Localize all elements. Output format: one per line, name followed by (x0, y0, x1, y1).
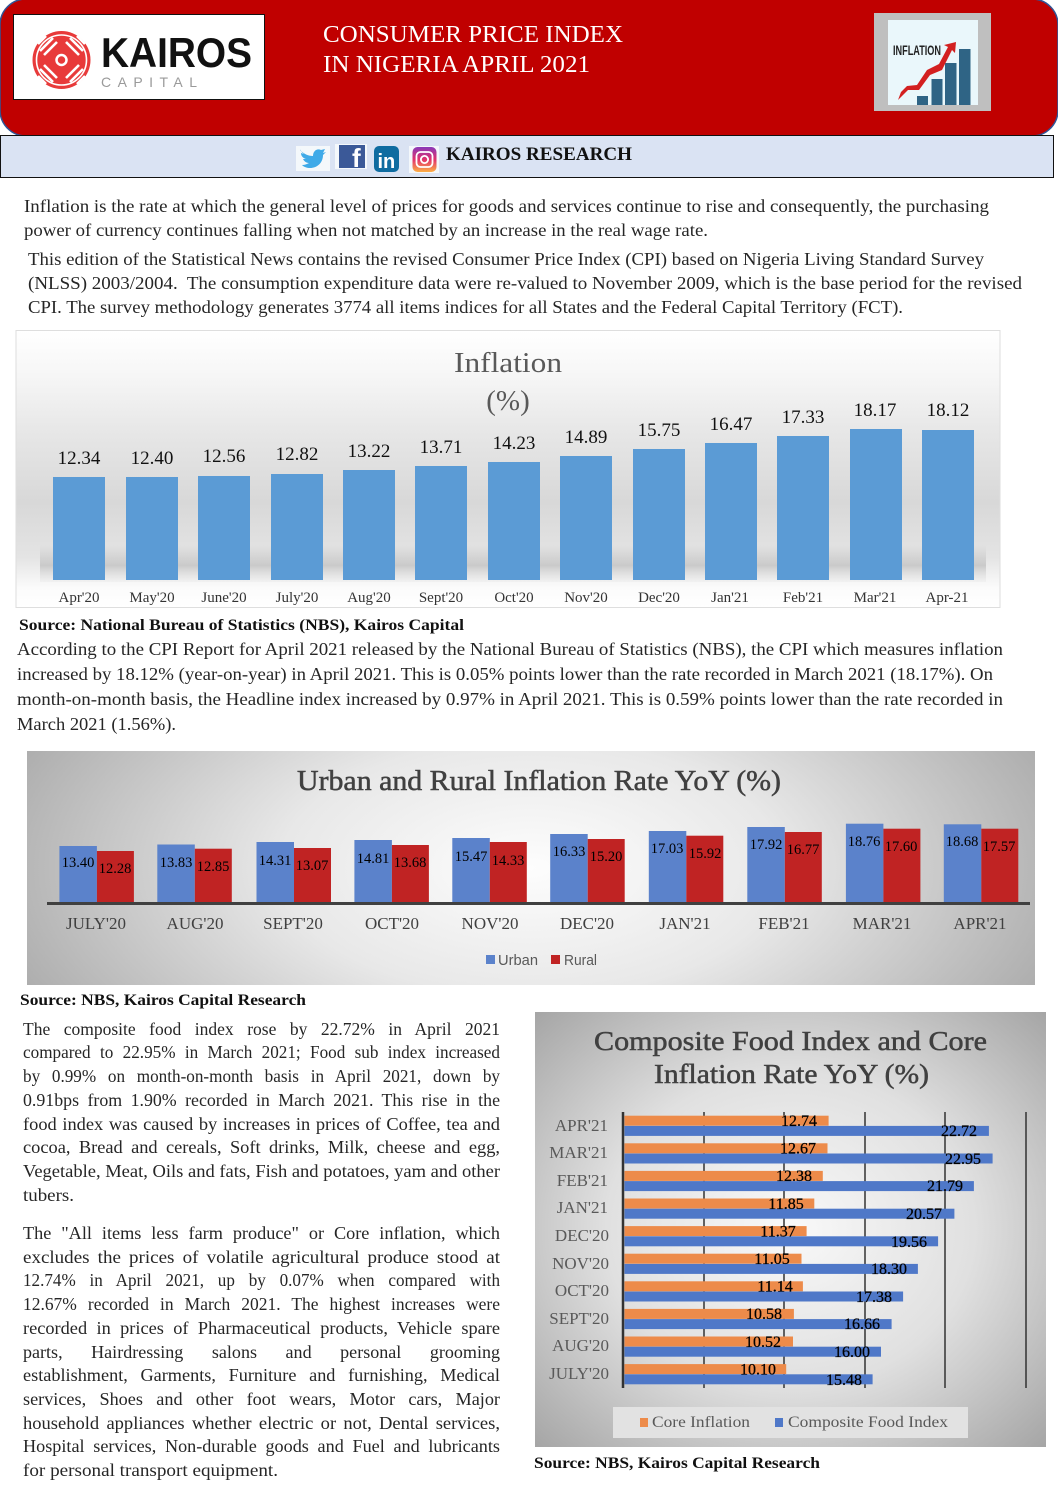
rural values: 16.77 (787, 842, 819, 858)
food index commentary: compared to 22.95% in March 2021; Food sub index increased (23, 1042, 500, 1062)
bar values: 17.33 (782, 407, 824, 428)
bar values: 16.47 (710, 414, 752, 435)
source: urban and rural chart: Source: NBS, Kairos Capital Research (20, 992, 306, 1009)
chart: composite food index and core inflation (535, 1012, 1046, 1447)
icon: instagram (409, 146, 439, 173)
month axis: Sept'20 (419, 590, 463, 606)
chart: inflation (16, 330, 1000, 608)
month axis: AUG'20 (167, 914, 223, 933)
food index commentary: food index was caused by increases in prices of Coffee, tea and (23, 1114, 500, 1134)
month axis: DEC'20 (555, 1226, 609, 1245)
core inflation values: 11.85 (768, 1196, 804, 1213)
core inflation commentary: 12.67% recorded in March 2021. The highest increases were (23, 1294, 500, 1314)
core inflation values: 10.10 (740, 1362, 776, 1378)
logo: Kairos Capital (14, 14, 264, 100)
month axis: MAR'21 (549, 1143, 608, 1162)
urban bars (59, 824, 981, 903)
chart title (454, 347, 563, 417)
icon: linkedin (374, 146, 399, 173)
month axis: Aug'20 (347, 590, 391, 606)
intro text (24, 196, 1022, 318)
month axis: June'20 (201, 590, 247, 606)
food index commentary: cocoa, Bread and cereals, Soft drinks, Milk, cheese and egg, (23, 1137, 500, 1157)
core inflation commentary: parts, Hairdressing salons and personal grooming (23, 1342, 500, 1362)
month axis: JULY'20 (549, 1364, 609, 1383)
composite food index bars (624, 1126, 993, 1384)
month axis: Mar'21 (854, 590, 896, 606)
month axis: FEB'21 (557, 1171, 608, 1190)
month axis: JAN'21 (659, 914, 711, 933)
composite food index values: 15.48 (826, 1372, 862, 1389)
composite food index values: 17.38 (856, 1289, 892, 1306)
chart: urban and rural inflation (27, 751, 1035, 985)
composite food index values: 21.79 (927, 1178, 963, 1195)
legend (486, 953, 597, 969)
icon: inflation chart image: INFLATION (893, 43, 941, 58)
month axis (66, 914, 1007, 933)
core inflation commentary: services, Shoes and other foot wears, Motor cars, Major (23, 1389, 500, 1409)
urban values: 16.33 (553, 844, 585, 860)
bar values: 14.89 (565, 427, 607, 448)
month axis (58, 590, 969, 606)
bar values: 13.22 (348, 441, 390, 462)
core inflation commentary: 12.74% in April 2021, up by 0.07% when compared with (23, 1270, 500, 1290)
core inflation commentary: excludes the prices of volatile agricultural produce stood at (23, 1247, 500, 1267)
month axis: FEB'21 (758, 914, 810, 933)
bar values: 18.12 (927, 400, 969, 421)
food index commentary: 0.91bps from 1.90% recorded in March 2021. This rise in the (23, 1090, 500, 1110)
composite food index values: 18.30 (871, 1261, 907, 1278)
urban values: 14.81 (357, 851, 389, 867)
intro text: power of currency continues falling when not matched by an increase in the real wage rate. (24, 220, 708, 240)
core inflation values: 12.38 (776, 1168, 812, 1185)
month axis: MAR'21 (853, 914, 911, 933)
month axis: NOV'20 (462, 914, 518, 933)
urban values: 13.83 (160, 855, 192, 871)
social label: KAIROS RESEARCH (446, 145, 633, 165)
month axis: JAN'21 (557, 1198, 608, 1217)
core inflation commentary (23, 1223, 500, 1480)
month axis: APR'21 (555, 1116, 608, 1135)
urban values: 14.31 (259, 853, 291, 869)
bar values: 12.56 (203, 446, 245, 467)
core inflation commentary: establishment, Garments, Furniture and furnishing, Medical (23, 1365, 500, 1385)
icon: facebook (335, 143, 367, 173)
bar values: 12.82 (276, 444, 318, 465)
food index commentary: Vegetable, Meat, Oils and fats, Fish and potatoes, yam and other (23, 1161, 500, 1181)
grid lines (623, 1112, 1026, 1388)
core inflation values: 10.52 (745, 1334, 781, 1351)
rural values: 15.92 (689, 846, 721, 862)
chart title (594, 1026, 987, 1089)
composite food index values: 19.56 (891, 1234, 927, 1251)
food index commentary: by 0.99% on month-on-month basis in April 2021, down by (23, 1066, 500, 1086)
bar values: 18.17 (854, 400, 896, 421)
logo: Kairos Capital: KAIROS (101, 29, 252, 76)
rural values: 17.60 (885, 839, 917, 855)
title: IN NIGERIA APRIL 2021 (323, 52, 590, 78)
month axis: JULY'20 (66, 914, 126, 933)
month axis: Apr-21 (925, 590, 969, 606)
logo: Kairos Capital: CAPITAL (101, 74, 197, 90)
chart title: (%) (486, 385, 530, 417)
core inflation commentary: Hospital services, Non-durable goods and Fuel and lubricants (23, 1436, 500, 1456)
month axis: SEPT'20 (549, 1309, 609, 1328)
intro text: (NLSS) 2003/2004. The consumption expenditure data were re-valued to November 2009, which is the base period for the revised (28, 273, 1022, 294)
core inflation bars (624, 1116, 829, 1374)
composite food index values: 22.95 (945, 1151, 981, 1168)
core inflation values: 12.74 (781, 1113, 817, 1130)
urban values: 18.68 (946, 834, 978, 850)
core inflation commentary: household appliances whether electric or not, Dental services, (23, 1413, 500, 1433)
intro text: CPI. The survey methodology generates 3774 all items indices for all States and the Federal Capital Territory (FCT). (28, 297, 903, 318)
month axis: May'20 (129, 590, 175, 606)
rural values: 17.57 (983, 839, 1015, 855)
icon: twitter (296, 146, 330, 171)
rural values (99, 839, 1015, 877)
month axis (549, 1116, 609, 1383)
rural bars (97, 829, 1018, 903)
rural values: 13.68 (394, 855, 426, 871)
intro text: This edition of the Statistical News contains the revised Consumer Price Index (CPI) based on Nigeria Living Standard Survey (28, 249, 984, 270)
urban values: 18.76 (848, 834, 880, 850)
title: CONSUMER PRICE INDEX (323, 22, 623, 48)
chart title: Inflation Rate YoY (%) (654, 1059, 929, 1089)
urban values: 17.92 (750, 837, 782, 853)
legend (613, 1407, 968, 1438)
rural values: 15.20 (590, 849, 622, 865)
legend: Rural (564, 953, 597, 969)
month axis: Dec'20 (638, 590, 680, 606)
month axis: APR'21 (953, 914, 1007, 933)
rural values: 12.28 (99, 861, 131, 877)
bar values (58, 400, 969, 469)
social bar (0, 136, 1054, 178)
core inflation values: 11.37 (760, 1224, 796, 1240)
month axis: Feb'21 (783, 590, 823, 606)
composite food index values (826, 1123, 981, 1389)
CPI commentary: According to the CPI Report for April 2021 released by the National Bureau of Statistics (NBS), the CPI which measures inflation (17, 639, 1003, 660)
chart title: Composite Food Index and Core (594, 1026, 987, 1056)
CPI commentary: month-on-month basis, the Headline index increased by 0.97% in April 2021. This is 0.59% points lower than the rate recorded in (17, 689, 1003, 709)
legend: Urban (498, 953, 538, 969)
month axis: Nov'20 (564, 590, 608, 606)
chart title: Urban and Rural Inflation Rate YoY (%) (297, 766, 781, 797)
bar values: 13.71 (420, 437, 462, 458)
month axis: AUG'20 (552, 1336, 609, 1355)
source: inflation chart: Source: National Bureau of Statistics (NBS), Kairos Capital (19, 617, 465, 634)
core inflation values: 12.67 (780, 1140, 816, 1158)
month axis: OCT'20 (365, 914, 419, 933)
bar values: 12.34 (58, 448, 101, 469)
month axis: NOV'20 (552, 1254, 609, 1273)
intro text: Inflation is the rate at which the general level of prices for goods and services continue to rise and consequently, the purchasing (24, 196, 989, 216)
urban values: 13.40 (62, 855, 94, 871)
CPI commentary: increased by 18.12% (year-on-year) in April 2021. This is 0.05% points lower than the rate recorded in March 2021 (18.17%). On (17, 664, 993, 685)
header banner (0, 0, 1058, 136)
bar values: 15.75 (638, 420, 680, 441)
rural values: 12.85 (197, 859, 229, 875)
source: composite chart: Source: NBS, Kairos Capital Research (534, 1455, 820, 1472)
month axis: SEPT'20 (263, 914, 323, 933)
composite food index values: 16.00 (834, 1344, 870, 1361)
title (323, 22, 623, 78)
food index commentary: tubers. (23, 1185, 74, 1205)
food index commentary (23, 1019, 500, 1205)
month axis: OCT'20 (555, 1281, 609, 1300)
composite food index values: 16.66 (844, 1316, 880, 1333)
rural values: 13.07 (296, 858, 328, 874)
composite food index values: 22.72 (941, 1123, 977, 1140)
chart title: Inflation (454, 347, 563, 379)
legend: Core Inflation (652, 1414, 750, 1431)
composite food index values: 20.57 (906, 1206, 942, 1223)
month axis: Apr'20 (58, 590, 100, 606)
month axis: Oct'20 (494, 590, 534, 606)
bar values: 14.23 (493, 433, 535, 454)
core inflation commentary: for personal transport equipment. (23, 1460, 278, 1480)
month axis: DEC'20 (560, 914, 614, 933)
CPI commentary (17, 639, 1003, 735)
bars (53, 429, 974, 580)
month axis: July'20 (276, 590, 318, 606)
baseline axis (47, 902, 1030, 905)
core inflation commentary: recorded in prices of Pharmaceutical products, Vehicle spare (23, 1318, 500, 1338)
urban values (62, 834, 978, 871)
month axis: Jan'21 (711, 590, 749, 606)
icon: facebook: f (352, 143, 361, 173)
core inflation values: 11.05 (754, 1251, 790, 1268)
core inflation commentary: The "All items less farm produce" or Core inflation, which (23, 1223, 500, 1243)
rural values: 14.33 (492, 853, 524, 869)
core inflation values: 10.58 (746, 1306, 782, 1323)
legend: Composite Food Index (788, 1414, 948, 1431)
core inflation values: 11.14 (757, 1278, 793, 1296)
icon: linkedin: in (378, 151, 395, 173)
CPI commentary: March 2021 (1.56%). (17, 714, 176, 735)
urban values: 15.47 (455, 849, 487, 865)
core inflation values (740, 1113, 817, 1378)
bar values: 12.40 (131, 448, 173, 469)
food index commentary: The composite food index rose by 22.72% in April 2021 (23, 1019, 500, 1039)
icon: inflation chart image (874, 13, 991, 111)
urban values: 17.03 (651, 841, 683, 857)
